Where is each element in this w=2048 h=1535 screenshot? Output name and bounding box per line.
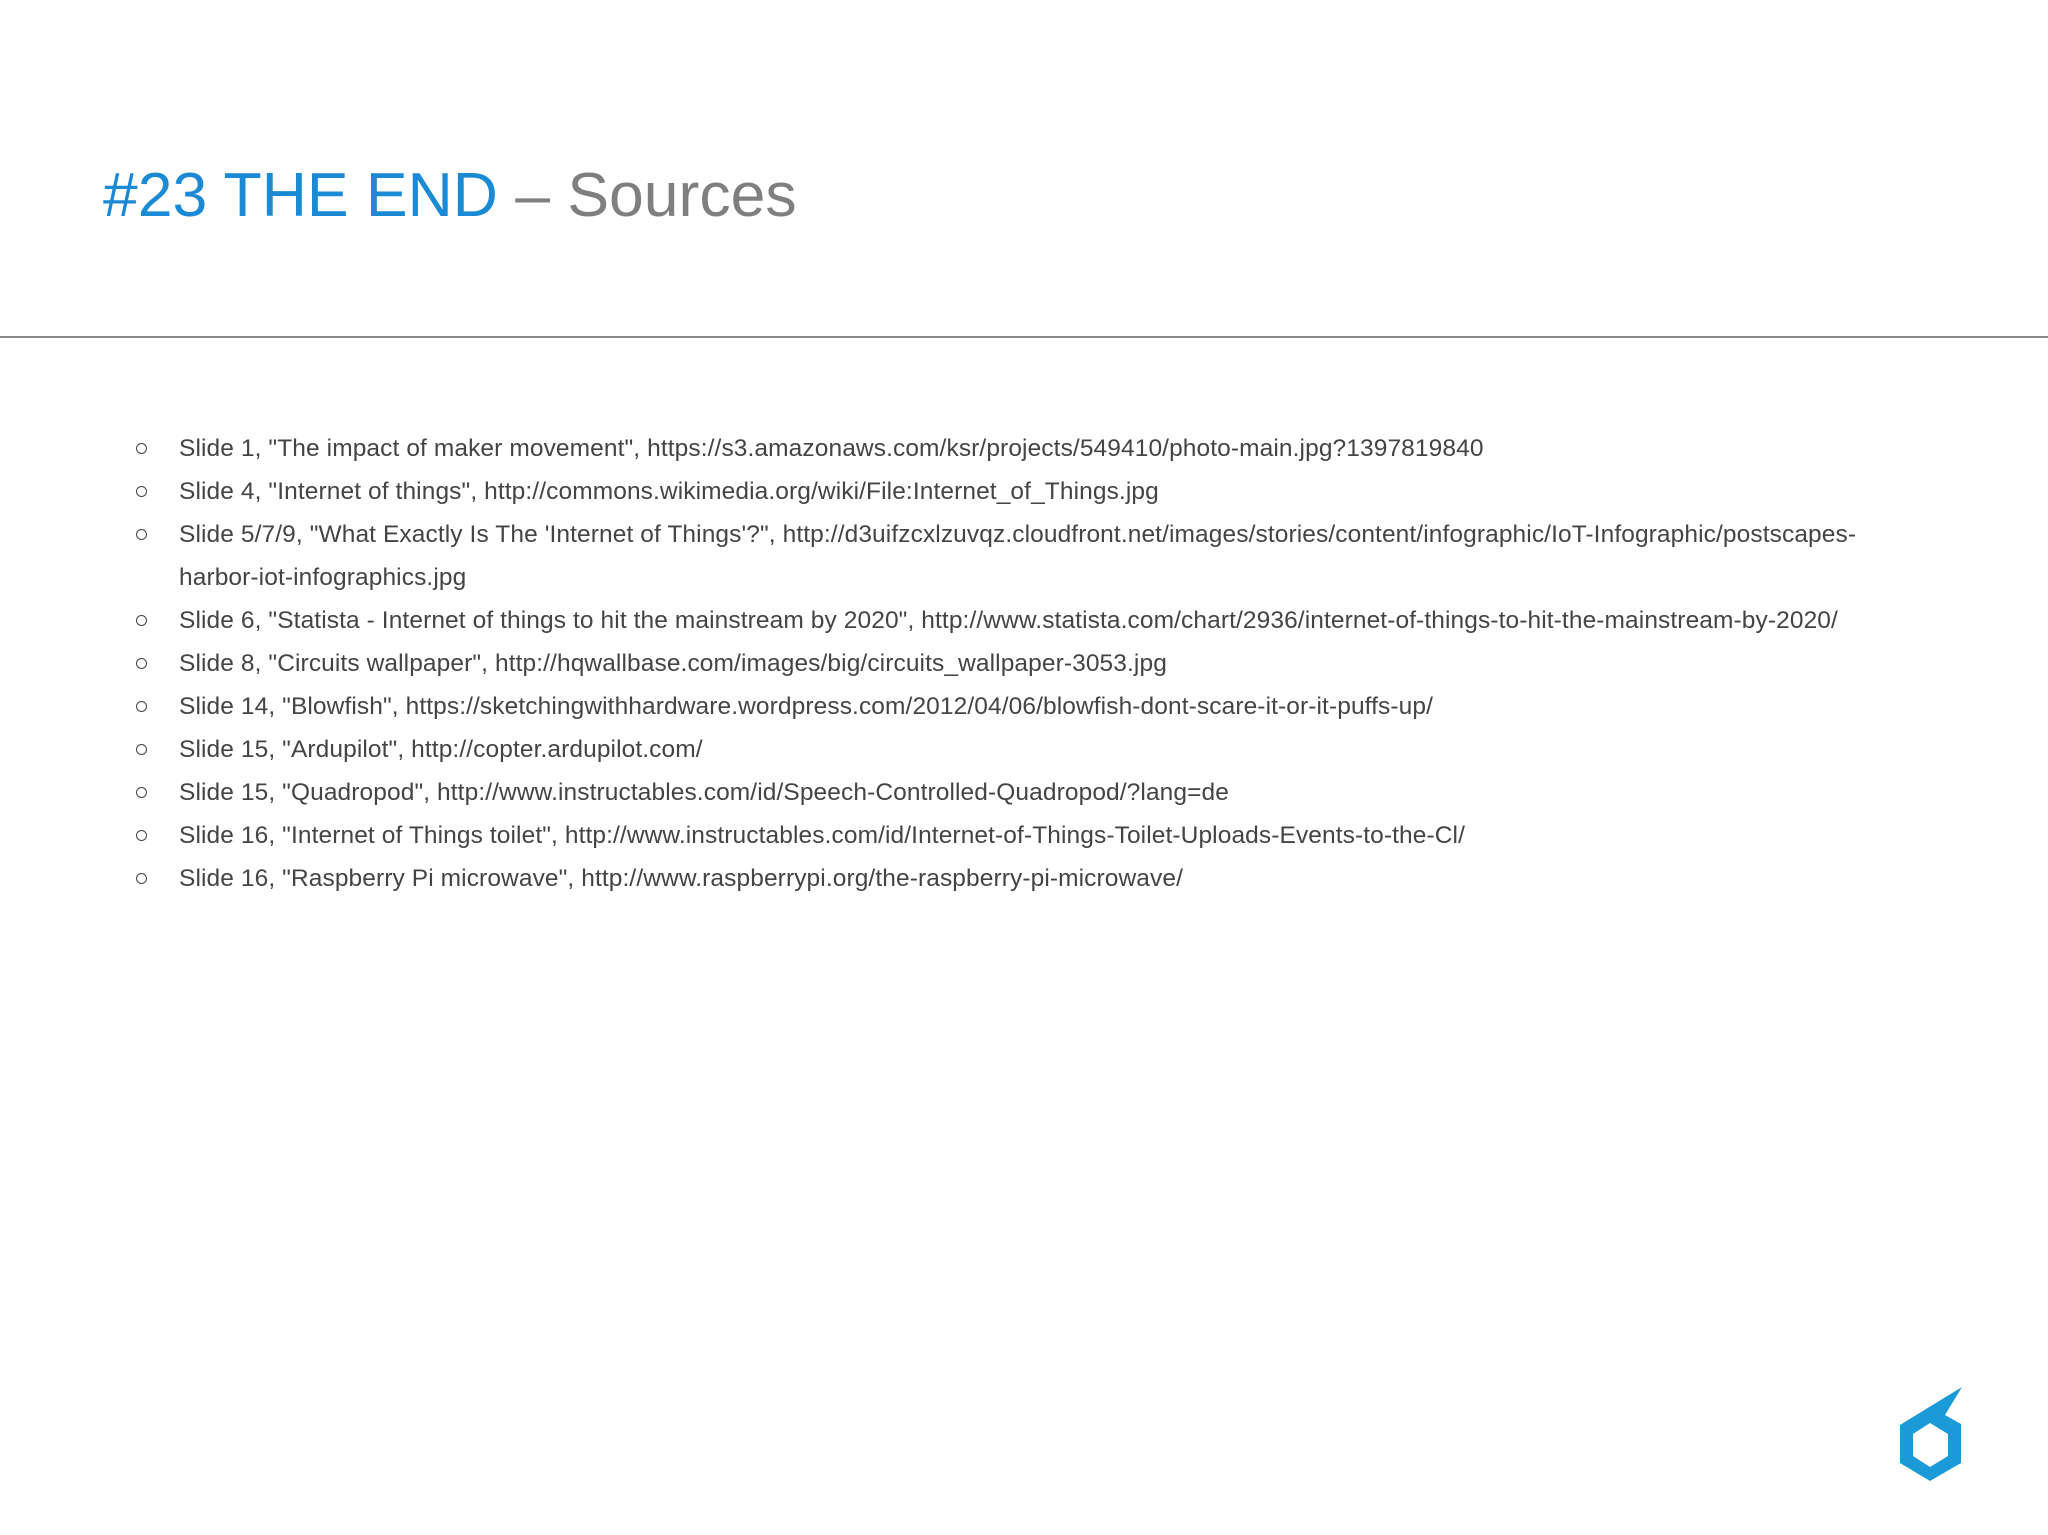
item 3: Slide 5/7/9, "What Exactly Is The 'Internet of Things'?", http://d3uifzcxlzuvqz.cloudfront.net/images/stories/content/infographic/IoT-Infographic/postscapes- (179, 521, 1856, 548)
item 2: Slide 4, "Internet of things", http://commons.wikimedia.org/wiki/File:Internet_of_Things.jpg (179, 478, 1159, 505)
item 10: Slide 16, "Raspberry Pi microwave", http://www.raspberrypi.org/the-raspberry-pi-microwave/ (179, 865, 1183, 892)
title: #23 THE END – Sources (103, 160, 797, 230)
item 3: harbor-iot-infographics.jpg (179, 564, 466, 591)
item 4: Slide 6, "Statista - Internet of things to hit the mainstream by 2020", http://www.statista.com/chart/2936/internet-of-things-to-hit-the-mainstream-by-2020/ (179, 607, 1838, 634)
item 7: Slide 15, "Ardupilot", http://copter.ardupilot.com/ (179, 736, 703, 763)
sources list (136, 435, 1856, 892)
item 8: Slide 15, "Quadropod", http://www.instructables.com/id/Speech-Controlled-Quadropod/?lang=de (179, 779, 1229, 806)
item 5: Slide 8, "Circuits wallpaper", http://hqwallbase.com/images/big/circuits_wallpaper-3053.jpg (179, 650, 1167, 677)
item 9: Slide 16, "Internet of Things toilet", http://www.instructables.com/id/Internet-of-Things-Toilet-Uploads-Events-to-the-Cl/ (179, 822, 1465, 849)
item 1: Slide 1, "The impact of maker movement", https://s3.amazonaws.com/ksr/projects/549410/photo-main.jpg?1397819840 (179, 435, 1484, 462)
item 3 (136, 513, 1856, 599)
item 6: Slide 14, "Blowfish", https://sketchingwithhardware.wordpress.com/2012/04/06/blowfish-dont-scare-it-or-it-puffs-up/ (179, 693, 1433, 720)
